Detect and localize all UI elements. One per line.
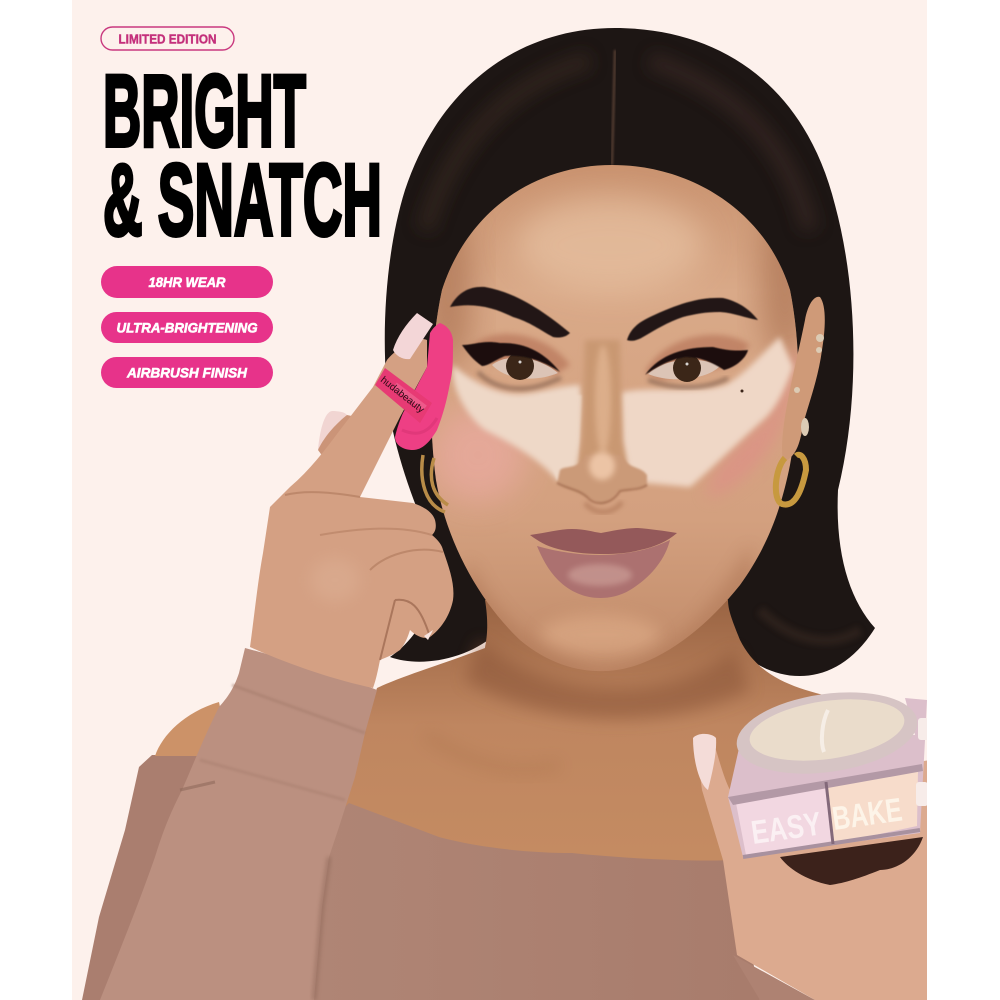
gold earring right	[776, 455, 806, 505]
index fingernail	[393, 313, 433, 359]
ear piercings	[794, 334, 824, 436]
title: Bright & Snatch: BRIGHT	[103, 54, 306, 168]
concealer right under eye	[620, 337, 793, 487]
blush right	[714, 352, 798, 488]
hair	[385, 28, 875, 676]
pill: ultra-brightening	[101, 312, 273, 343]
left hand side finger	[318, 415, 351, 454]
lips	[530, 528, 677, 598]
sweater sleeve	[100, 648, 377, 1000]
collarbone shadow	[425, 735, 560, 770]
face	[424, 165, 825, 680]
side fingernail	[318, 411, 347, 450]
left eye	[462, 342, 561, 389]
jar label text: EASY	[749, 805, 823, 851]
badge: limited edition	[101, 27, 234, 50]
left shoulder skin	[155, 702, 220, 756]
neck shadow	[465, 640, 750, 719]
puff strap on finger	[375, 368, 432, 423]
sweater body	[270, 803, 760, 1000]
nose bridge	[575, 340, 630, 480]
right eyebrow	[627, 298, 758, 341]
neck and chest	[346, 600, 822, 860]
eyeshadow	[470, 334, 570, 375]
pill: airbrush finish: AIRBRUSH FINISH	[126, 364, 248, 380]
title: Bright & Snatch	[103, 54, 382, 257]
forehead highlight	[515, 197, 705, 293]
product jar: Easy Bake: BAKE	[830, 791, 904, 837]
sweater back arm	[82, 755, 196, 1000]
pink makeup puff	[395, 323, 453, 450]
left hand	[250, 339, 453, 688]
pill: 18hr wear	[101, 266, 273, 298]
left hand finger nail small	[424, 630, 433, 640]
left eyebrow	[450, 287, 570, 338]
nose tip	[556, 460, 648, 501]
right ear	[782, 297, 825, 462]
gold earring left	[422, 455, 448, 512]
powder puff under jar	[780, 837, 923, 885]
chin highlight	[540, 615, 660, 655]
right hand fingernails	[916, 718, 930, 806]
puff strap on finger: hudabeauty	[378, 375, 426, 416]
pill: airbrush finish	[101, 357, 273, 388]
temple contour	[436, 230, 484, 368]
title: Bright & Snatch: & SNATCH	[103, 143, 382, 257]
concealer left under eye	[453, 365, 582, 483]
product jar: Easy Bake	[728, 682, 927, 857]
right hand holding product	[693, 734, 930, 1000]
pill: ultra-brightening: ULTRA-BRIGHTENING	[116, 320, 258, 336]
right eye	[645, 347, 748, 392]
pill: 18hr wear: 18HR WEAR	[148, 274, 226, 290]
badge: limited edition: LIMITED EDITION	[118, 32, 216, 46]
blush left	[430, 407, 526, 503]
jaw shadow	[470, 556, 754, 669]
